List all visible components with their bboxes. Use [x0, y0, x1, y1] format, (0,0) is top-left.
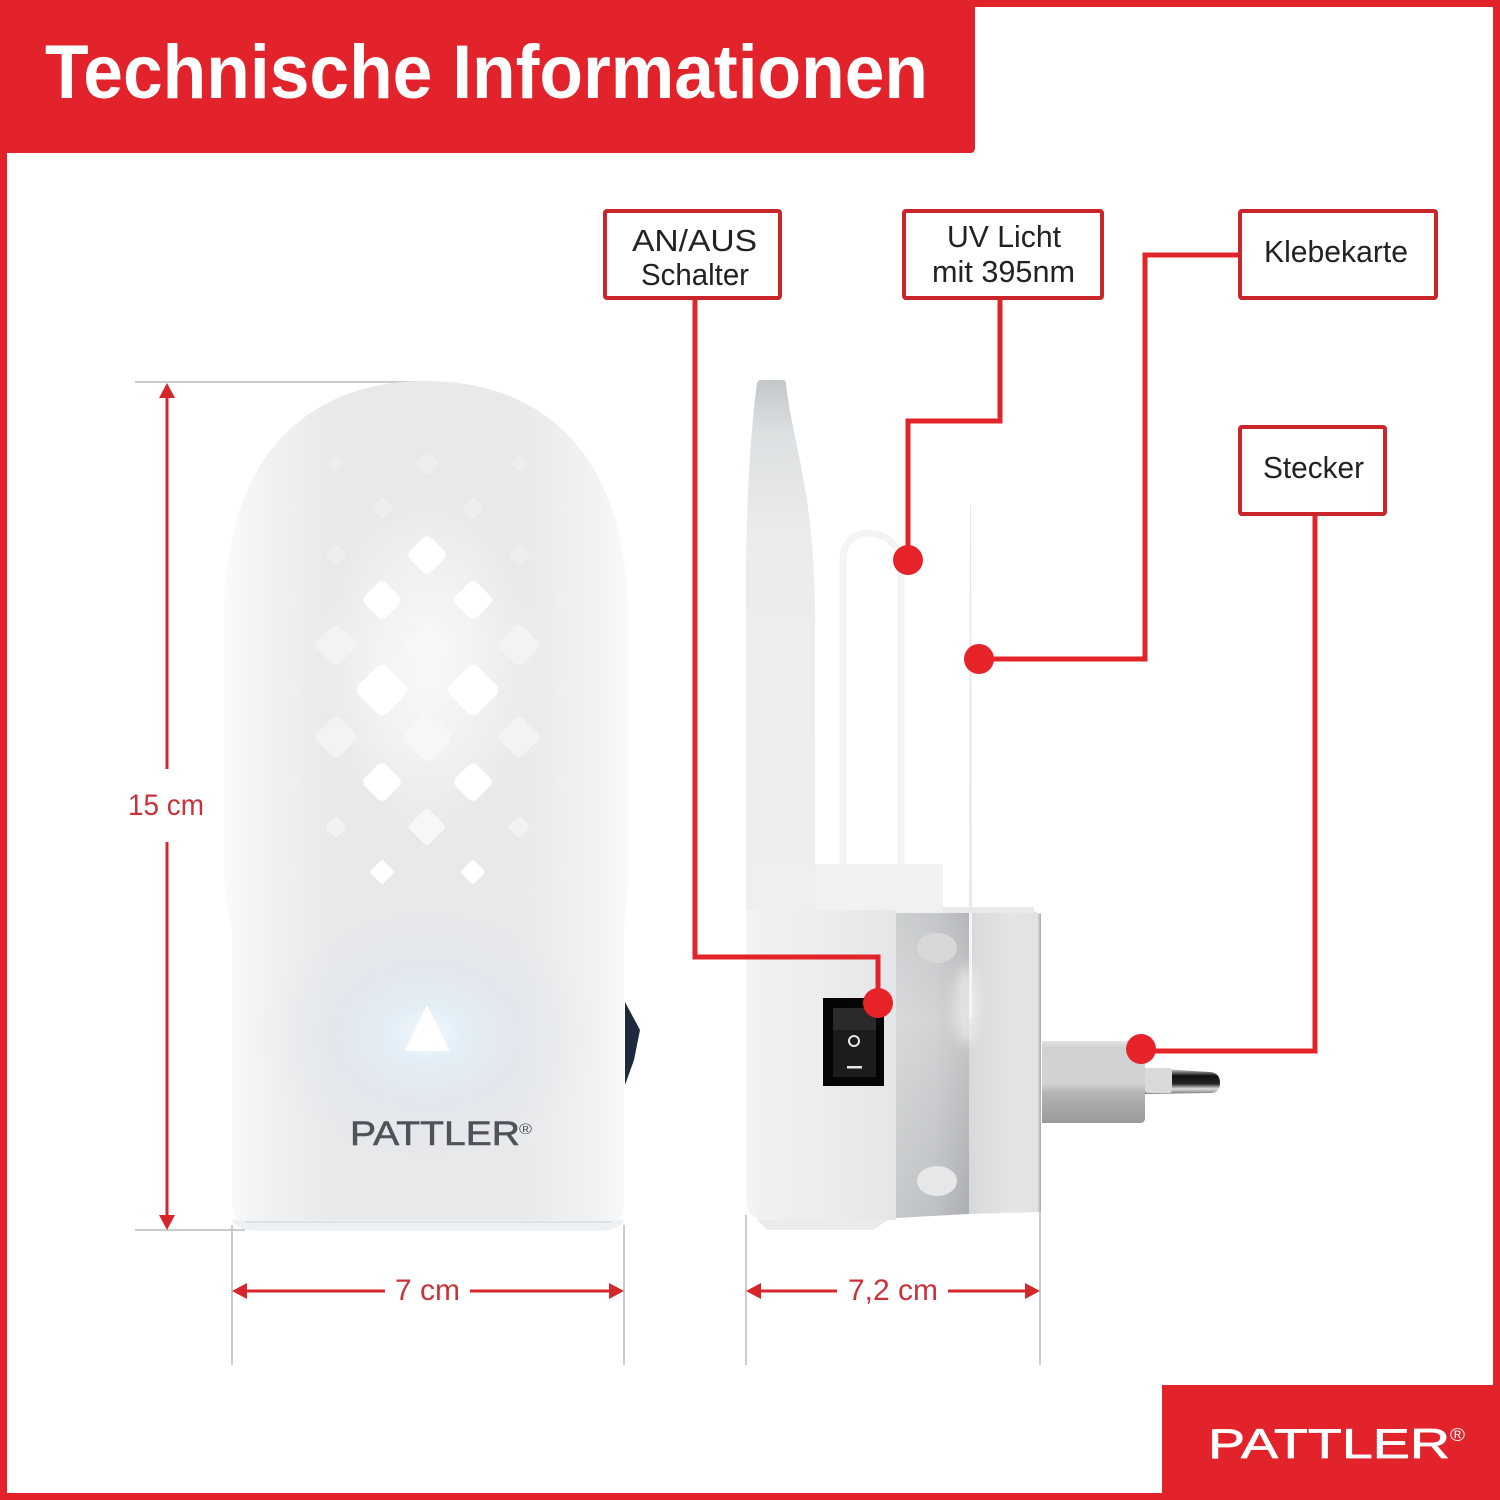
label: AN/AUS Schalter: [605, 211, 780, 298]
title banner: Technische Informationen: [45, 30, 928, 115]
base rim shadow line: [245, 1221, 612, 1223]
brand badge: ®: [1450, 1425, 1465, 1445]
icon: side switch: [625, 1002, 640, 1085]
plug pin collar: [1145, 1068, 1172, 1093]
top ledge: [942, 907, 1034, 913]
plug pin: [1145, 1068, 1220, 1094]
suction clip loop: [843, 533, 901, 866]
card slot: [969, 913, 972, 1018]
label: AN/AUS Schalter: Schalter: [641, 257, 749, 292]
connector dots: [863, 545, 1156, 1064]
logo on device: ®: [519, 1121, 532, 1138]
label: UV Licht: UV Licht: [947, 219, 1061, 254]
diffuse light glow: [317, 495, 537, 835]
dimension: height 15 cm: 15 cm: [128, 789, 204, 822]
clip mount block: [812, 864, 943, 914]
label: Klebekarte: Klebekarte: [1264, 234, 1408, 269]
dimension: width 7 cm: [232, 1274, 624, 1307]
diamond light pattern: [280, 450, 574, 885]
triangle LED: [406, 1007, 448, 1050]
mounting bump bottom: [917, 1166, 957, 1196]
dimension: width 7 cm: 7 cm: [395, 1274, 460, 1307]
label: UV Licht: [904, 211, 1102, 298]
dimension: height 15 cm: [128, 383, 204, 1230]
card slot glow: [954, 965, 978, 1045]
blue light glow: [257, 905, 597, 1165]
lower body: [746, 910, 896, 1220]
dimension: depth 7,2 cm: [746, 1274, 1040, 1307]
label: Stecker: [1240, 427, 1385, 514]
product front view: [224, 381, 640, 1231]
glue card sheet: [969, 505, 972, 1020]
label: AN/AUS Schalter: AN/AUS: [632, 223, 757, 258]
dark centre band: [896, 913, 969, 1218]
device base rim: [232, 1220, 624, 1231]
right housing: [969, 911, 1041, 1214]
body foot: [757, 1220, 888, 1230]
connector lines: [695, 255, 1315, 1051]
label: Klebekarte: [1240, 211, 1436, 298]
dimension guide lines: [135, 382, 1040, 1365]
label: Stecker: Stecker: [1263, 450, 1364, 485]
rocker switch: [823, 998, 884, 1086]
label: UV Licht: mit 395nm: [932, 254, 1075, 289]
back plate: [746, 380, 815, 915]
dimension: depth 7,2 cm: 7,2 cm: [848, 1274, 938, 1307]
brand badge: [1162, 1385, 1500, 1500]
brand badge: PATTLER: [1208, 1420, 1450, 1467]
logo on device: PATTLER: [350, 1115, 520, 1153]
band highlight: [896, 913, 969, 1213]
plug: [1042, 1041, 1220, 1123]
device body front: [224, 381, 628, 1225]
mounting bump top: [917, 933, 957, 963]
product side view: [746, 380, 1220, 1230]
title banner: [0, 0, 975, 153]
